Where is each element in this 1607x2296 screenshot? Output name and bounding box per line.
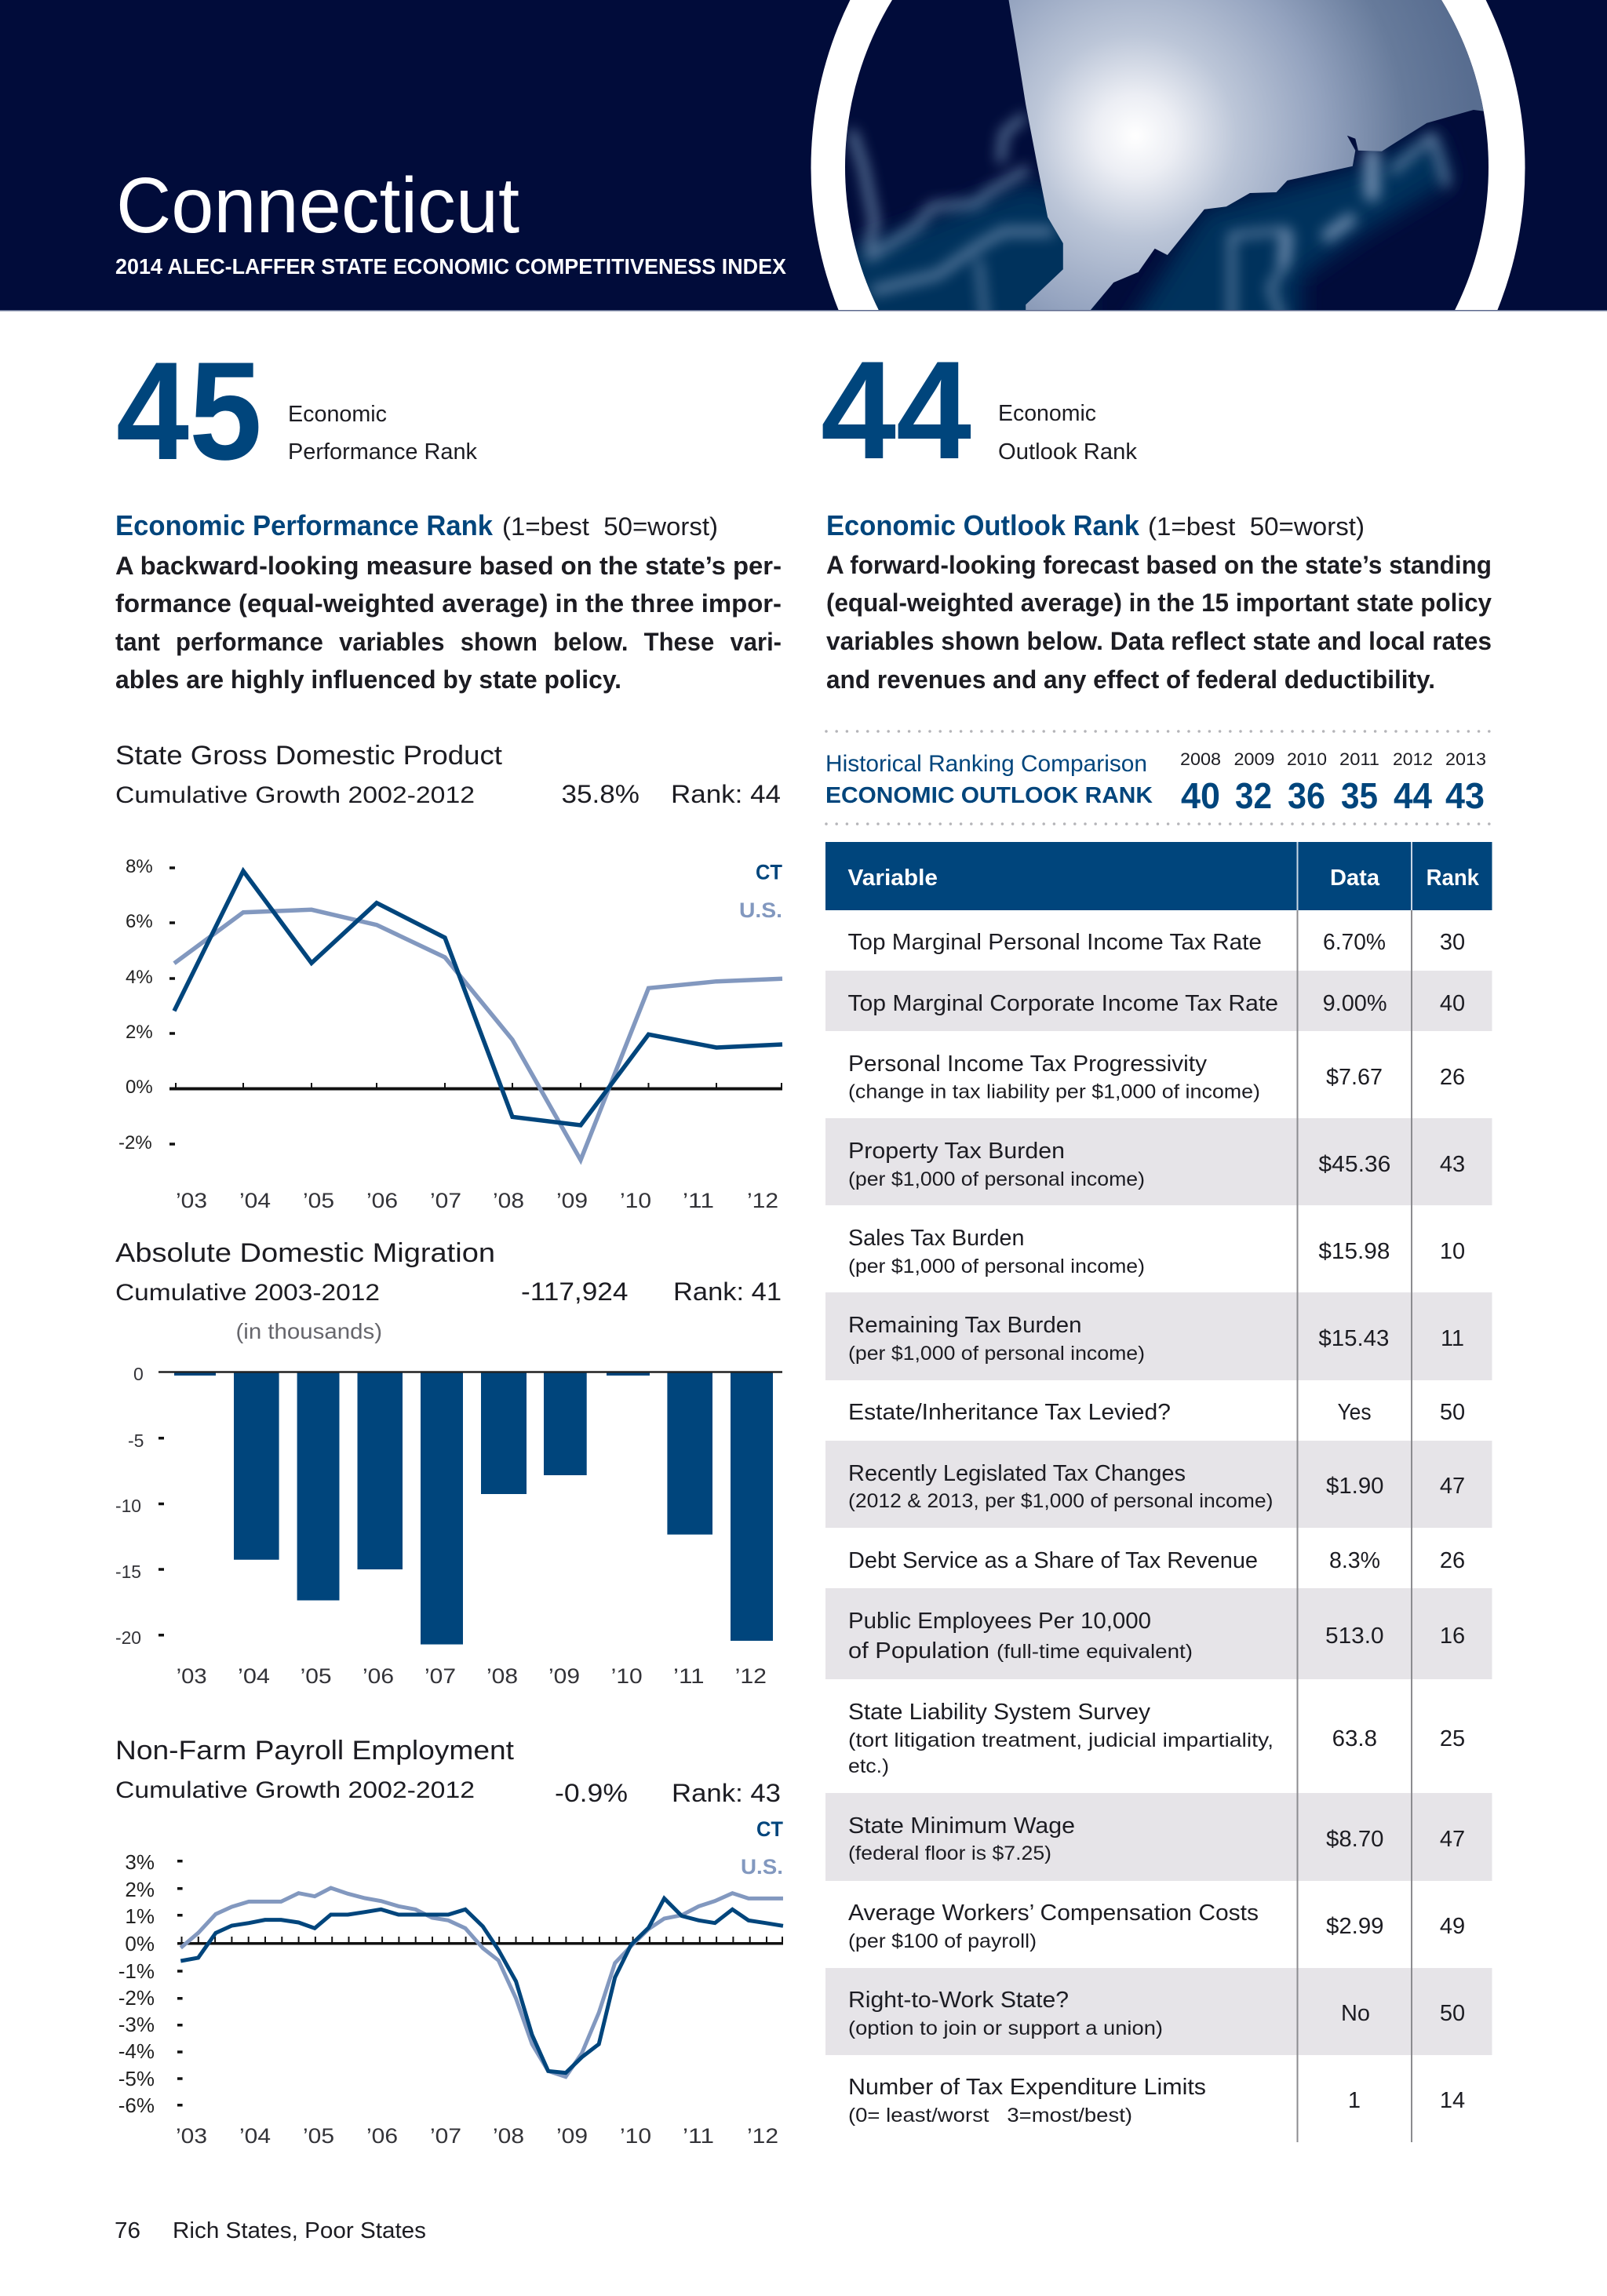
legend: CT [756,861,782,884]
x axis labels: ’07 [430,1189,461,1212]
row: top marginal corporate income tax rate: Top Marginal Corporate Income Tax Rate [847,991,1278,1016]
years row [1180,749,1486,769]
rank caption [998,401,1137,465]
alternating row backgrounds [825,971,1492,2055]
y axis labels: 0% [125,1932,155,1955]
row: public employees per 10,000 of population: 513.0 [1325,1624,1384,1649]
historical ranking labels: ECONOMIC OUTLOOK RANK [825,783,1153,808]
line: CT [180,1898,783,2073]
chart heading [115,741,781,808]
x axis labels: ’08 [486,1664,518,1688]
rank caption [288,402,477,465]
y axis labels: -15 [115,1562,141,1582]
chart heading [115,1238,782,1343]
row: personal income tax progressivity: $7.67 [1326,1065,1383,1090]
x axis labels: ’09 [548,1664,580,1688]
row: sales tax burden: 10 [1440,1239,1465,1264]
panel: historical ranking comparison [825,731,1492,824]
row: state minimum wage: State Minimum Wage [848,1813,1075,1839]
y axis labels: -2% [118,1132,152,1153]
chart heading: Cumulative Growth 2002-2012 [115,1777,475,1803]
footer: Rich States, Poor States [173,2218,426,2243]
row: state liability system survey: 25 [1440,1726,1465,1751]
row: state liability system survey: (tort litigation treatment, judicial impartiality, [848,1729,1274,1751]
x axis labels: ’04 [239,2124,271,2148]
text block: outlook description [826,551,1492,694]
row: top marginal personal income tax rate: Top Marginal Personal Income Tax Rate [847,930,1262,955]
legend: CT [756,1817,783,1841]
row: state liability system survey [848,1700,1465,1777]
line chart: payroll employment [118,1817,783,2148]
row: public employees per 10,000 of population [848,1609,1465,1664]
table header: Data [1330,866,1380,891]
y axis labels: -5% [118,2067,155,2090]
table header [825,842,1492,910]
row: top marginal personal income tax rate: 30 [1440,930,1465,955]
row: personal income tax progressivity [848,1051,1465,1103]
years row: 2009 [1233,749,1274,769]
row: property tax burden: $45.36 [1318,1152,1390,1177]
x axis labels: ’12 [735,1664,767,1688]
chart heading: Rank: 44 [671,780,781,808]
row: estate/inheritance tax levied: 50 [1440,1400,1465,1425]
chart heading: Rank: 43 [672,1779,781,1807]
row: debt service as a share of tax revenue: Debt Service as a Share of Tax Revenue [848,1548,1258,1573]
x axis labels: ’05 [303,1189,334,1212]
text block: performance description: ables are highly influenced by state policy. [115,665,621,694]
y axis labels: -6% [118,2094,155,2117]
x axis labels: ’05 [303,2124,334,2148]
x axis labels: ’08 [493,1189,524,1212]
y axis labels: 4% [126,967,153,988]
historical rank numbers: 40 [1181,775,1220,816]
y axis labels: -1% [118,1959,155,1983]
state map medallion [846,0,1484,310]
row: property tax burden: Property Tax Burden [848,1139,1065,1164]
row: state minimum wage: $8.70 [1326,1827,1384,1852]
heading: economic performance rank: (1=best 50=worst) [502,512,718,541]
x axis labels: ’11 [683,2124,714,2148]
row: recently legislated tax changes [848,1461,1465,1512]
row: debt service as a share of tax revenue [848,1548,1465,1573]
row: average workers' compensation costs: Average Workers’ Compensation Costs [848,1901,1259,1926]
row: recently legislated tax changes: $1.90 [1326,1474,1384,1499]
chart heading: -0.9% [555,1779,628,1807]
row: remaining tax burden: 11 [1441,1326,1464,1351]
row: state minimum wage: (federal floor is $7.25) [848,1842,1051,1864]
chart heading: Absolute Domestic Migration [115,1238,495,1268]
row: estate/inheritance tax levied: Estate/Inheritance Tax Levied? [848,1400,1171,1425]
row: number of tax expenditure limits: (0= least/worst 3=most/best) [848,2105,1132,2127]
y axis labels: -2% [118,1986,155,2010]
panel: economic performance rank [115,333,782,694]
x axis labels [176,1189,778,1212]
panel: non-farm payroll employment [115,1736,783,2148]
row: public employees per 10,000 of population: 16 [1440,1624,1465,1649]
rank caption: Economic [998,401,1096,426]
historical rank numbers: 35 [1341,775,1378,816]
row: personal income tax progressivity: 26 [1440,1065,1465,1090]
row: personal income tax progressivity: Personal Income Tax Progressivity [848,1051,1208,1077]
heading: economic outlook rank: (1=best 50=worst) [1148,512,1365,541]
row: debt service as a share of tax revenue: 26 [1440,1548,1465,1573]
historical rank numbers: 36 [1288,775,1325,816]
row: personal income tax progressivity: (change in tax liability per $1,000 of income) [848,1081,1260,1103]
row: average workers' compensation costs: $2.99 [1326,1914,1384,1939]
x axis labels: ’10 [620,1189,651,1212]
row: property tax burden: 43 [1440,1152,1465,1177]
text block: performance description: A backward-looking measure based on the state’s per- [115,552,782,580]
row: top marginal personal income tax rate: 6.70% [1323,930,1386,955]
row: top marginal corporate income tax rate [847,991,1465,1016]
heading: economic performance rank [115,509,718,541]
row: number of tax expenditure limits [848,2075,1465,2127]
chart heading: (in thousands) [235,1319,382,1343]
text block: performance description: formance (equal-weighted average) in the three impor- [115,589,782,618]
row: right-to-work state: (option to join or support a union) [848,2017,1163,2039]
footer: 76 [115,2218,140,2243]
text block: outlook description: (equal-weighted average) in the 15 important state policy [826,589,1492,617]
bar chart: domestic migration [115,1364,782,1688]
row: debt service as a share of tax revenue: 8.3% [1329,1548,1380,1573]
table: state policy variables [825,842,1492,2142]
rank caption: Economic [288,402,387,427]
row: sales tax burden: $15.98 [1318,1239,1390,1264]
heading: economic outlook rank: Economic Outlook Rank [826,509,1140,541]
chart heading: -117,924 [521,1277,628,1306]
x axis labels: ’11 [673,1664,705,1688]
row: remaining tax burden [848,1313,1464,1365]
row: recently legislated tax changes: Recently Legislated Tax Changes [848,1461,1186,1486]
y axis labels: 8% [126,856,153,877]
row: public employees per 10,000 of population: of Population [848,1638,989,1664]
y axis labels: 2% [126,1022,153,1043]
text block: performance description [115,552,782,694]
x axis labels: ’04 [239,1189,271,1212]
rank caption: Performance Rank [288,439,477,465]
rank caption: Outlook Rank [998,439,1137,465]
row: right-to-work state: Right-to-Work State? [848,1988,1069,2013]
x axis labels: ’06 [363,1664,394,1688]
historical ranking labels: Historical Ranking Comparison [825,751,1147,777]
y axis labels: 1% [125,1904,155,1928]
line: CT [174,871,782,1125]
x axis labels: ’12 [747,2124,778,2148]
x axis labels: ’05 [301,1664,332,1688]
x axis labels: ’09 [556,1189,588,1212]
row: remaining tax burden: $15.43 [1318,1326,1389,1351]
text block: outlook description: and revenues and any effect of federal deductibility. [826,665,1435,694]
line chart: GDP growth [118,856,782,1212]
chart heading: Cumulative 2003-2012 [115,1280,380,1306]
panel: state gross domestic product [115,741,782,1212]
row: top marginal corporate income tax rate: 40 [1440,991,1465,1016]
x axis labels: ’10 [611,1664,643,1688]
years row: 2013 [1445,749,1486,769]
years row: 2012 [1393,749,1433,769]
panel: absolute domestic migration [115,1238,782,1688]
row: property tax burden: (per $1,000 of personal income) [848,1168,1145,1190]
x axis labels: ’03 [176,2124,207,2148]
x axis labels: ’12 [747,1189,778,1212]
x axis labels: ’03 [177,1664,207,1688]
row: top marginal corporate income tax rate: 9.00% [1323,991,1387,1016]
bars [174,1372,773,1645]
row: right-to-work state [848,1988,1465,2039]
row: sales tax burden: Sales Tax Burden [848,1226,1025,1251]
title: Connecticut [116,162,519,250]
y axis labels: 3% [125,1850,155,1874]
table header: Variable [847,866,938,891]
y axis labels [115,1364,144,1648]
row: right-to-work state: 50 [1440,2001,1465,2026]
row: state minimum wage [848,1813,1465,1864]
x axis labels: ’07 [430,2124,461,2148]
x axis labels: ’07 [425,1664,456,1688]
row: estate/inheritance tax levied [848,1400,1465,1425]
years row: 2008 [1180,749,1221,769]
icon: white ring around state map [811,0,1525,310]
chart heading: Cumulative Growth 2002-2012 [115,782,475,808]
row: sales tax burden [848,1226,1465,1277]
legend: U.S. [741,1855,783,1879]
historical rank numbers: 44 [1394,775,1432,816]
x axis labels: ’03 [176,1189,207,1212]
y axis labels: 2% [125,1878,155,1901]
chart heading [115,1736,781,1807]
heading: economic outlook rank [826,509,1365,541]
subtitle: 2014 ALEC-LAFFER STATE ECONOMIC COMPETITIVENESS INDEX [115,254,786,279]
chart heading: Non-Farm Payroll Employment [115,1736,515,1766]
row: state liability system survey: 63.8 [1332,1726,1377,1751]
x axis labels: ’06 [366,1189,398,1212]
historical rank numbers [1181,775,1485,816]
y axis labels [118,856,153,1153]
row: public employees per 10,000 of population: Public Employees Per 10,000 [848,1609,1151,1634]
rank number 44: 44 [821,332,971,488]
panel: economic outlook rank [821,332,1492,694]
x axis labels: ’10 [620,2124,651,2148]
row: number of tax expenditure limits: 1 [1348,2088,1361,2113]
y axis labels: -3% [118,2013,155,2036]
row: average workers' compensation costs [848,1901,1465,1952]
row: number of tax expenditure limits: 14 [1440,2088,1465,2113]
heading: economic performance rank: Economic Performance Rank [115,509,494,541]
legend: U.S. [739,898,782,922]
row: public employees per 10,000 of population: (full-time equivalent) [997,1641,1193,1663]
row: sales tax burden: (per $1,000 of personal income) [848,1256,1145,1277]
row: remaining tax burden: Remaining Tax Burden [848,1313,1081,1338]
row: top marginal personal income tax rate [847,930,1465,955]
row: average workers' compensation costs: 49 [1440,1914,1465,1939]
y axis labels: 0% [126,1077,153,1098]
table header: Rank [1427,866,1480,891]
years row: 2011 [1339,749,1379,769]
historical rank numbers: 32 [1235,775,1272,816]
historical ranking labels [825,751,1153,808]
rank number 45: 45 [116,333,262,489]
legend [741,1817,783,1879]
row: right-to-work state: No [1341,2001,1370,2026]
line: U.S. [180,1888,783,2077]
page header banner [0,0,1607,311]
row: state liability system survey: State Liability System Survey [848,1700,1151,1725]
y axis labels: 6% [126,911,153,932]
row: remaining tax burden: (per $1,000 of personal income) [848,1343,1145,1365]
chart heading: 35.8% [562,780,640,808]
x axis labels: ’09 [556,2124,588,2148]
row: property tax burden [848,1139,1465,1190]
x axis labels: ’04 [238,1664,270,1688]
text block: outlook description: variables shown below. Data reflect state and local rates [826,627,1492,655]
years row: 2010 [1287,749,1327,769]
historical rank numbers: 43 [1445,775,1485,816]
x axis labels [176,2124,778,2148]
y axis labels: -5 [128,1430,144,1451]
y axis labels: -20 [115,1627,141,1648]
chart heading: State Gross Domestic Product [115,741,503,771]
y axis labels: -10 [115,1496,141,1516]
x axis labels: ’06 [366,2124,398,2148]
row: recently legislated tax changes: 47 [1440,1474,1465,1499]
text block: outlook description: A forward-looking forecast based on the state’s standing [826,551,1492,579]
x axis labels: ’11 [683,1189,714,1212]
x axis labels [177,1664,767,1688]
row: recently legislated tax changes: (2012 & 2013, per $1,000 of personal income) [848,1490,1273,1512]
row: estate/inheritance tax levied: Yes [1337,1400,1372,1425]
text block: performance description: tant performance variables shown below. These vari- [115,628,782,656]
x axis labels: ’08 [493,2124,524,2148]
y axis labels [118,1850,155,2117]
row: average workers' compensation costs: (per $100 of payroll) [848,1930,1037,1952]
row: state liability system survey: etc.) [848,1755,889,1777]
line: U.S. [174,909,782,1160]
chart heading: Rank: 41 [673,1277,782,1306]
row: number of tax expenditure limits: Number of Tax Expenditure Limits [848,2075,1206,2100]
row: state minimum wage: 47 [1440,1827,1465,1852]
y axis labels: -4% [118,2039,155,2063]
legend [739,861,782,922]
y axis labels: 0 [133,1364,144,1384]
